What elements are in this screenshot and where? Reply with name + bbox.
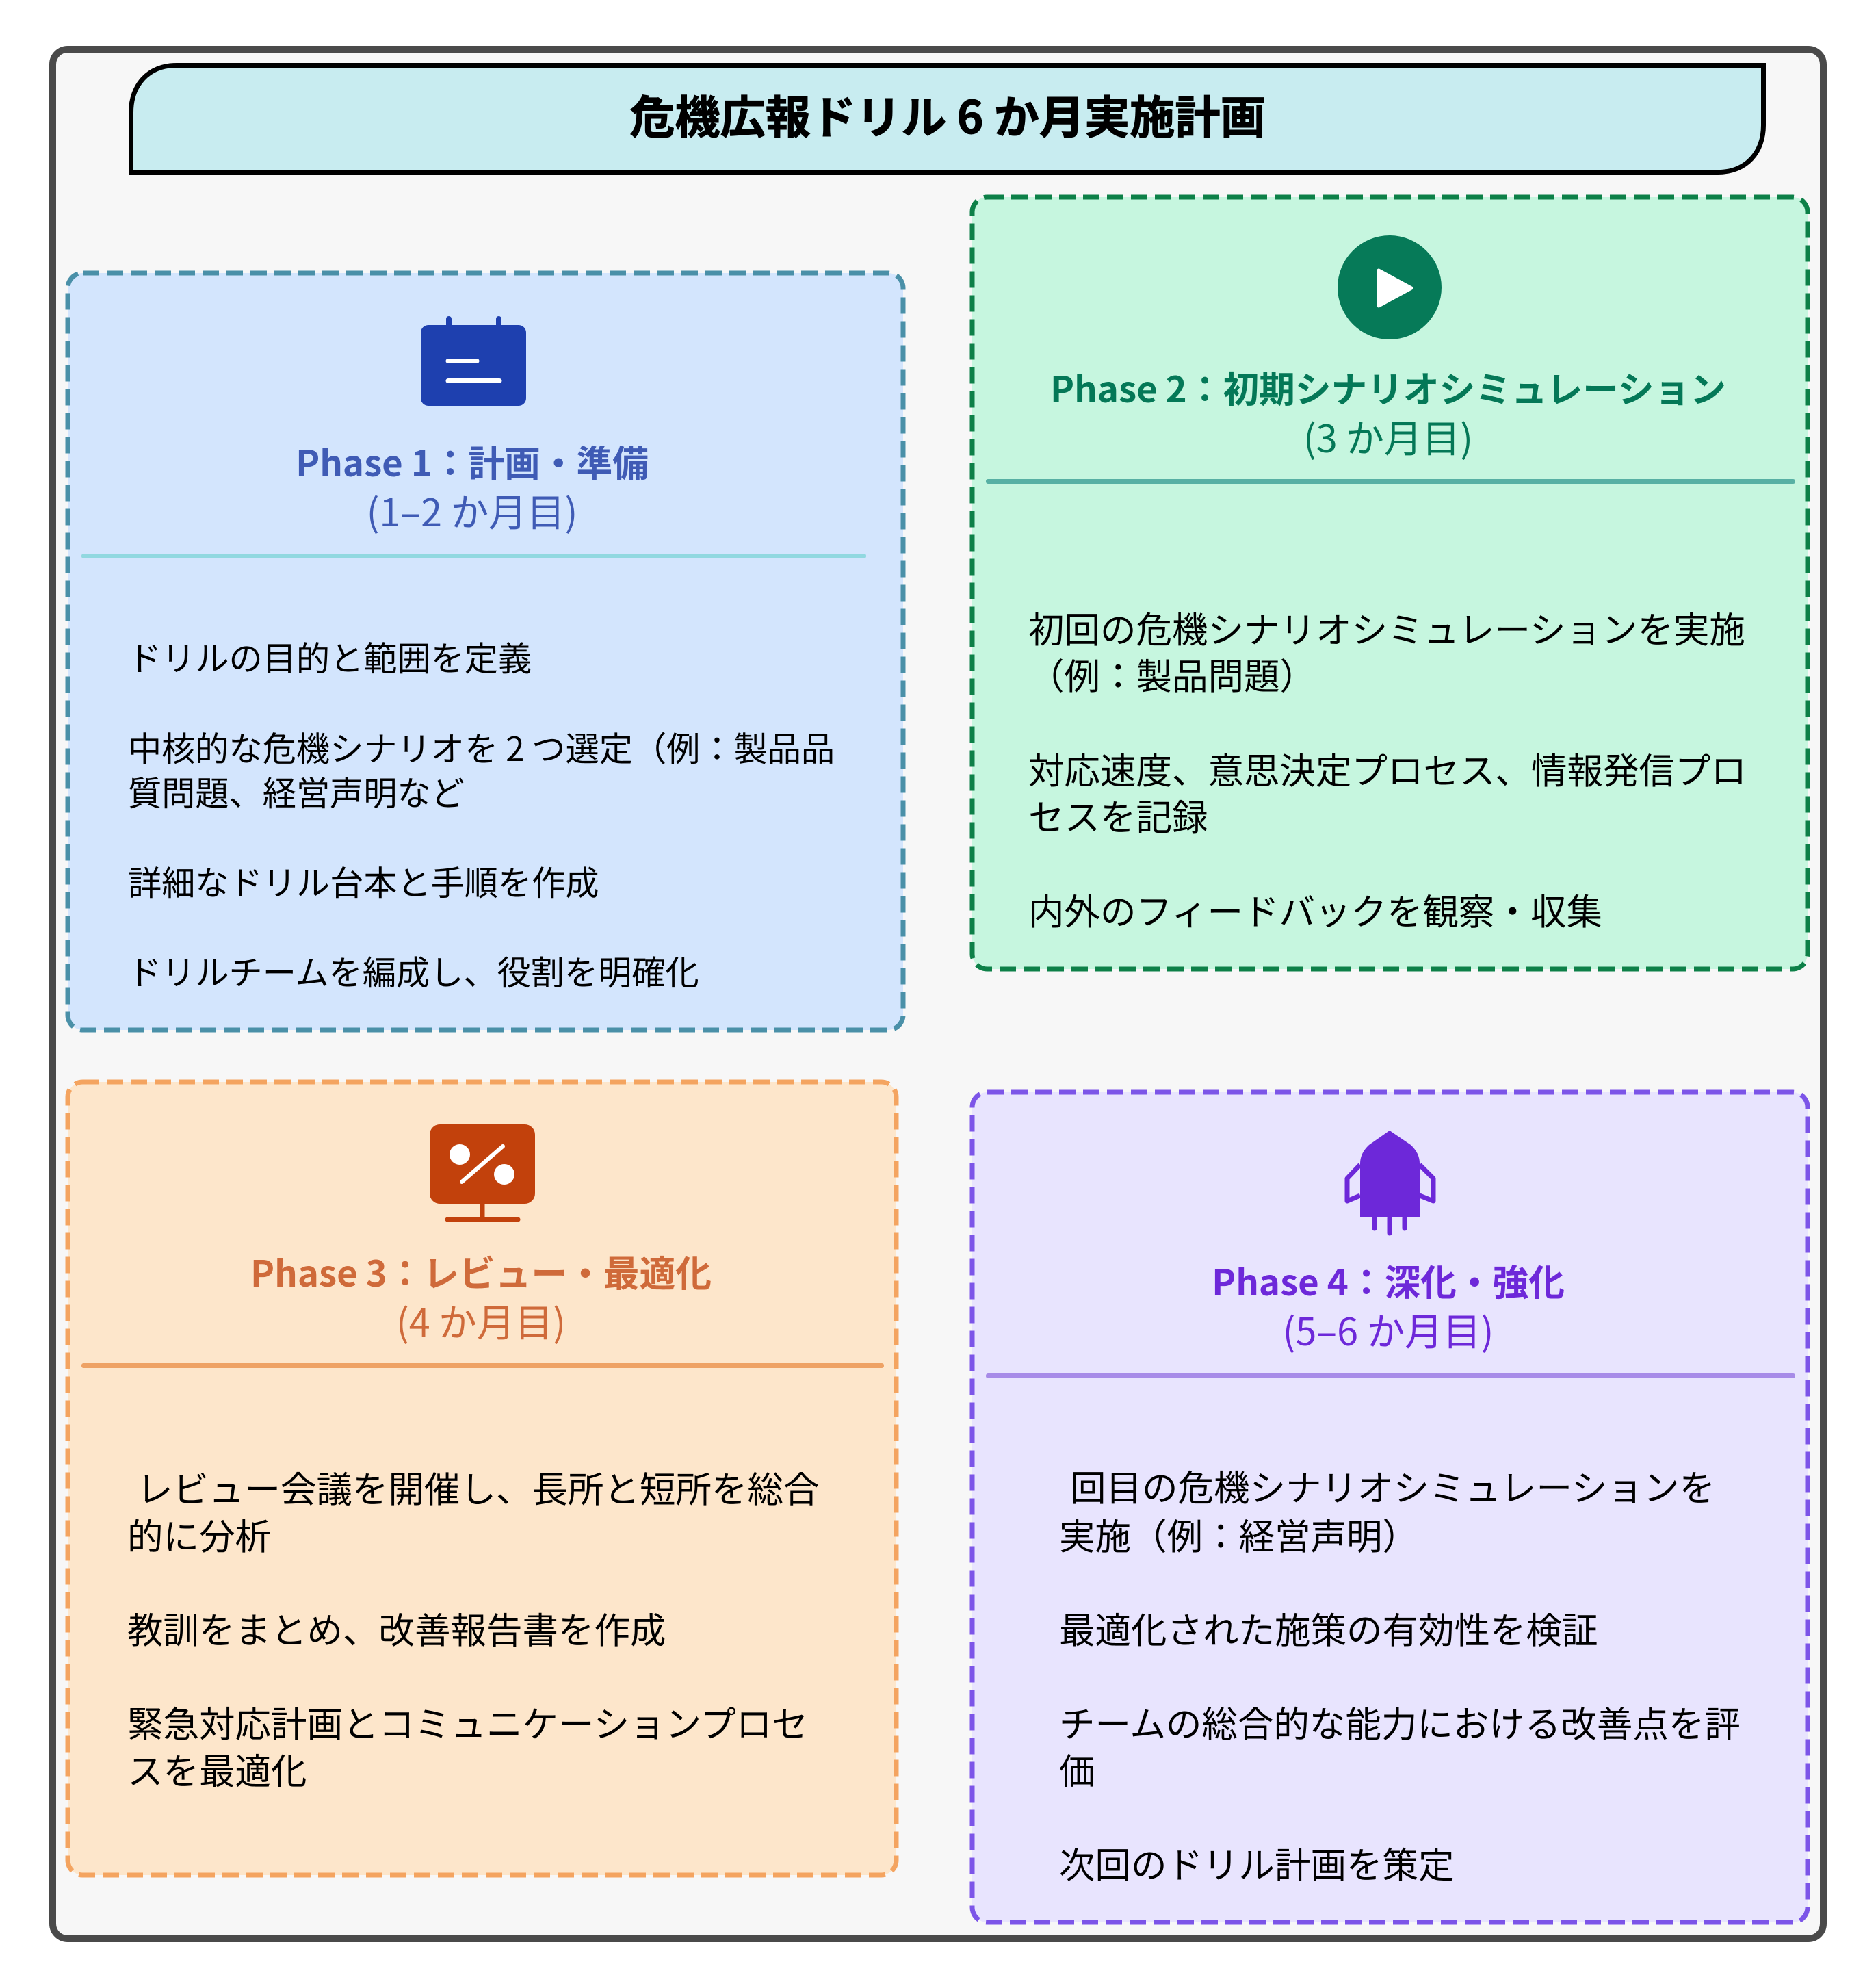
panel: phase 4 xyxy=(972,1092,1808,1922)
title banner: 危機広報ドリル 6 か月実施計画 xyxy=(629,81,1266,147)
icon: monitor percent xyxy=(430,1124,535,1219)
text: phase 1 tasks: ドリルチームを編成し、役割を明確化 xyxy=(128,946,699,995)
text: phase 3 tasks: 緊急対応計画とコミュニケーションプロセ xyxy=(127,1696,808,1748)
text: phase 2 tasks xyxy=(1028,602,1747,935)
icon: rocket xyxy=(1347,1131,1433,1233)
text: phase 4 tasks: 回目の危機シナリオシミュレーションを xyxy=(1070,1460,1715,1512)
text: phase 1 tasks: 中核的な危機シナリオを 2 つ選定（例：製品品 xyxy=(128,723,835,771)
text: phase 4 tasks: 最適化された施策の有効性を検証 xyxy=(1059,1602,1598,1654)
panel: phase 3 xyxy=(68,1082,896,1875)
icon: play xyxy=(1338,235,1442,339)
text: phase 2 tasks: 対応速度、意思決定プロセス、情報発信プロ xyxy=(1028,743,1747,795)
text: phase 3 tasks xyxy=(127,1461,820,1795)
subheading: phase 1: (1–2 か月目) xyxy=(367,482,577,538)
text: phase 2 tasks: 初回の危機シナリオシミュレーションを実施 xyxy=(1028,602,1745,654)
text: phase 1 tasks: ドリルの目的と範囲を定義 xyxy=(128,632,532,681)
text: phase 4 tasks: 次回のドリル計画を策定 xyxy=(1059,1837,1455,1889)
text: phase 4 tasks xyxy=(1059,1460,1741,1889)
text: phase 1 tasks: 質問題、経営声明など xyxy=(128,767,465,816)
heading: phase 1: Phase 1：計画・準備 xyxy=(296,435,649,487)
panel: phase 2 xyxy=(972,197,1808,969)
subheading: phase 4: (5–6 か月目) xyxy=(1283,1302,1494,1357)
text: phase 2 tasks: （例：製品問題） xyxy=(1028,648,1316,700)
text: phase 4 tasks: チームの総合的な能力における改善点を評 xyxy=(1059,1696,1741,1748)
text: phase 1 tasks: 詳細なドリル台本と手順を作成 xyxy=(128,857,599,905)
heading: phase 4: Phase 4：深化・強化 xyxy=(1212,1254,1565,1306)
title banner xyxy=(131,66,1764,172)
text: phase 3 tasks: スを最適化 xyxy=(127,1743,307,1795)
text: phase 3 tasks: 教訓をまとめ、改善報告書を作成 xyxy=(127,1602,666,1654)
text: phase 2 tasks: セスを記録 xyxy=(1028,789,1208,841)
panel: phase 1 xyxy=(68,273,903,1030)
subheading: phase 3: (4 か月目) xyxy=(396,1293,566,1348)
icon: calendar xyxy=(421,316,526,406)
text: phase 4 tasks: 実施（例：経営声明） xyxy=(1059,1508,1418,1560)
text: phase 3 tasks: 的に分析 xyxy=(127,1508,271,1560)
subheading: phase 2: (3 か月目) xyxy=(1303,409,1473,464)
heading: phase 3: Phase 3：レビュー・最適化 xyxy=(250,1245,712,1298)
text: phase 2 tasks: 内外のフィードバックを観察・収集 xyxy=(1028,883,1602,935)
text: phase 1 tasks xyxy=(128,632,835,995)
text: phase 3 tasks: レビュー会議を開催し、長所と短所を総合 xyxy=(137,1461,820,1513)
heading: phase 2: Phase 2：初期シナリオシミュレーション xyxy=(1050,361,1726,413)
text: phase 4 tasks: 価 xyxy=(1059,1743,1095,1795)
